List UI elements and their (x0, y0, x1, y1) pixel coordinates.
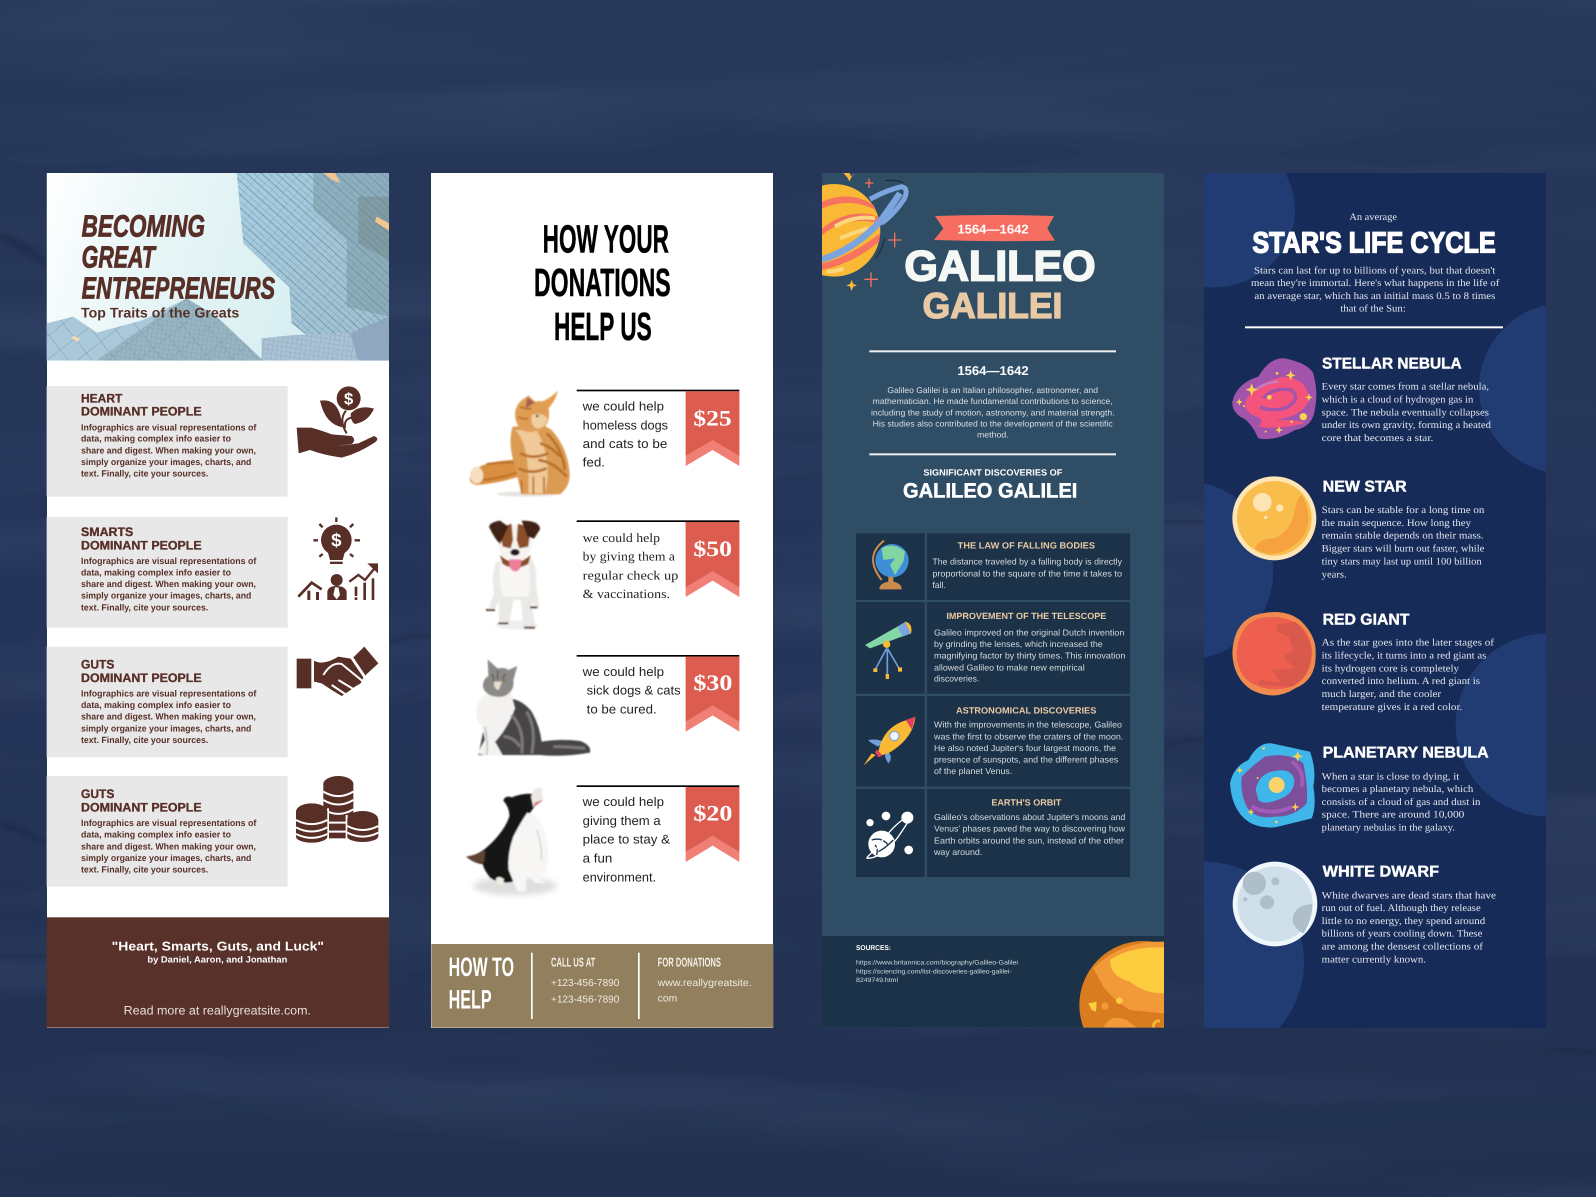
table row: law of falling bodies: THE LAW OF FALLING BODIES (958, 541, 1095, 551)
title (534, 217, 671, 349)
section: red giant: its lifecycle, it turns into a red giant as (1322, 650, 1486, 661)
row: $25: homeless dogs (583, 418, 668, 432)
row: guts dominant people: share and digest. When making your own, (81, 712, 256, 722)
row: $25 (577, 390, 739, 470)
table row: improvement of the telescope: allowed Galileo to make new empirical (934, 662, 1085, 672)
icon: rocket (863, 717, 915, 766)
row: $50: by giving them a (583, 550, 675, 564)
icon: coin stacks (296, 776, 378, 843)
section: stellar nebula: space. The nebula eventually collapses (1322, 407, 1489, 418)
header photo: glass skyscrapers (47, 173, 389, 628)
subtitle: Top Traits of the Greats (81, 305, 239, 321)
decorative background circles (1204, 173, 1546, 1028)
section: planetary nebula: planetary nebulas in the galaxy. (1322, 822, 1455, 833)
section: new star: years. (1322, 569, 1347, 580)
icon: handshake (297, 647, 378, 696)
icon: new star (1232, 476, 1316, 560)
row: $25: we could help (582, 400, 664, 414)
footer: sources: 8249749.html (856, 977, 898, 984)
header text: an average star, which has an initial mass 0.5 to 8 times (1254, 290, 1495, 301)
row: heart dominant people: share and digest. When making your own, (81, 445, 256, 455)
title: HOW YOUR (543, 217, 669, 261)
section: stellar nebula: core that becomes a star. (1322, 432, 1433, 443)
icon: hand holding money plant (297, 386, 377, 458)
row: guts dominant people: DOMINANT PEOPLE (81, 671, 202, 685)
table row: astronomical discoveries: ASTRONOMICAL DISCOVERIES (956, 705, 1096, 715)
row: $30: to be cured. (587, 702, 657, 716)
title: GALILEO (904, 242, 1096, 290)
section: red giant: its hydrogen core is completely (1322, 663, 1459, 674)
row: $25: $25 (693, 406, 732, 431)
row: guts dominant people second: GUTS (81, 787, 114, 801)
icon: stellar nebula (1232, 358, 1316, 439)
icon: telescope (865, 622, 912, 679)
row: guts dominant people: GUTS (81, 658, 114, 671)
row: guts dominant people second: Infographics are visual representations of (81, 818, 257, 828)
section: white dwarf: White dwarves are dead stars that have (1322, 890, 1496, 901)
header text: Stars can last for up to billions of years, but that doesn't (1254, 265, 1496, 276)
row: $20 (577, 785, 739, 884)
section: red giant: converted into helium. A red giant is (1322, 675, 1480, 686)
table row: improvement of the telescope: magnifying factor by thirty times. This innovation (934, 651, 1125, 661)
footer: how to help: +123-456-7890 (551, 977, 619, 988)
row: smarts dominant people: data, making complex info easier to (81, 568, 231, 578)
row: guts dominant people second: DOMINANT PEOPLE (81, 800, 202, 814)
section: white dwarf: matter currently known. (1322, 954, 1426, 965)
section: white dwarf: run out of fuel. Although they release (1322, 902, 1481, 913)
icon: planets in orbit (866, 812, 913, 858)
table row: law of falling bodies: fall. (932, 580, 946, 590)
section: stellar nebula: Every star comes from a stellar nebula, (1322, 381, 1489, 392)
table row: improvement of the telescope: discoveries. (934, 674, 979, 684)
row: $20: a fun (583, 851, 612, 865)
heading: significant discoveries: GALILEO GALILEI (903, 479, 1077, 502)
table row: astronomical discoveries: presence of sunspots, and the different phases (934, 755, 1118, 765)
section: red giant: RED GIANT (1323, 610, 1409, 628)
row: $50: & vaccinations. (583, 587, 670, 601)
title: DONATIONS (534, 261, 671, 305)
ribbon: dates (934, 215, 1055, 241)
footer: book quote (47, 917, 389, 1028)
footer: how to help: HELP (449, 984, 492, 1014)
icon: light bulb with chart (298, 517, 378, 600)
row: heart dominant people: HEART (81, 391, 122, 405)
header text: STAR'S LIFE CYCLE (1252, 226, 1496, 259)
title: BECOMING (82, 209, 205, 243)
footer: how to help: FOR DONATIONS (658, 956, 721, 970)
row: guts dominant people second (47, 776, 288, 887)
biography text block: including the study of motion, astronomy, and material strength. (871, 408, 1115, 417)
row: guts dominant people (47, 647, 288, 757)
footer: sources: https://sciencing.com/list-discoveries-galileo-galilei- (856, 968, 1012, 975)
panel: becoming great entrepreneurs (47, 173, 389, 1028)
photo: grey long-haired cat (476, 659, 590, 756)
row: $20: environment. (583, 870, 656, 884)
row: guts dominant people: Infographics are visual representations of (81, 689, 257, 699)
header text: that of the Sun: (1340, 303, 1406, 314)
row: smarts dominant people: simply organize your images, charts, and (81, 591, 251, 601)
section: planetary nebula: consists of a cloud of gas and dust in (1322, 796, 1480, 807)
row: heart dominant people (47, 386, 288, 497)
table row: law of falling bodies (856, 533, 1130, 600)
row: $20: giving them a (583, 814, 661, 828)
biography text block (869, 350, 1116, 455)
section: new star: Stars can be stable for a long time on (1322, 504, 1484, 515)
section: stellar nebula: under its own gravity, forming a heated (1322, 419, 1491, 430)
footer: sources: https://www.britannica.com/biography/Galileo-Galilei (856, 959, 1018, 966)
row: smarts dominant people: Infographics are visual representations of (81, 556, 257, 566)
row: $20: place to stay & (583, 833, 670, 847)
section: red giant: As the star goes into the later stages of (1322, 637, 1494, 648)
row: $50: we could help (583, 531, 660, 545)
section: new star: tiny stars may last up until 100 billion (1322, 556, 1482, 567)
table row: astronomical discoveries: He also noted Jupiter's four largest moons, the (934, 743, 1116, 753)
ribbon: dates: 1564—1642 (957, 222, 1029, 236)
section: new star: Bigger stars will burn out faster, while (1322, 543, 1484, 554)
section: white dwarf: are among the densest collections of (1322, 941, 1483, 952)
row: guts dominant people second: share and digest. When making your own, (81, 841, 256, 851)
section: white dwarf: billions of years cooling down. These (1322, 928, 1482, 939)
footer: how to help: HOW TO (449, 952, 514, 982)
title: ENTREPRENEURS (82, 271, 275, 305)
row: $30: $30 (693, 671, 732, 695)
row: guts dominant people second: simply organize your images, charts, and (81, 853, 251, 863)
heading: significant discoveries (903, 467, 1077, 502)
table row: improvement of the telescope: Galileo improved on the original Dutch invention (934, 628, 1124, 638)
title (82, 209, 275, 305)
section: white dwarf: little to no energy, they spend around (1322, 915, 1485, 926)
header text: An average (1349, 211, 1397, 222)
row: $30 (577, 655, 739, 732)
title (904, 242, 1096, 326)
row: $20: we could help (582, 795, 664, 809)
title: HELP US (554, 305, 652, 349)
section: red giant: temperature gives it a red color. (1322, 701, 1462, 712)
biography text block: His studies also contributed to the development of the scientific (873, 419, 1113, 428)
section: planetary nebula: space. There are around 10,000 (1322, 809, 1464, 820)
section: stellar nebula: which is a cloud of hydrogen gas in (1322, 394, 1473, 405)
row: smarts dominant people: text. Finally, cite your sources. (81, 602, 208, 612)
illustration: orange planet (1079, 941, 1164, 1028)
footer: how to help: www.reallygreatsite. (657, 977, 752, 988)
row: $50: $50 (693, 537, 732, 561)
footer: how to help: CALL US AT (551, 956, 595, 970)
table row: law of falling bodies: The distance traveled by a falling body is directly (932, 557, 1122, 567)
icon: light bulb with chart: $ (331, 530, 342, 551)
photo: jack russell dog (486, 521, 540, 630)
icon: planetary nebula (1230, 743, 1315, 827)
biography text block: mathematician. He made fundamental contributions to science, (873, 397, 1113, 406)
table row: astronomical discoveries: of the planet Venus. (934, 766, 1012, 776)
table row: law of falling bodies: proportional to the square of the time it takes to (932, 568, 1122, 578)
row: $50 (577, 520, 739, 601)
row: $20: $20 (693, 801, 732, 825)
row: heart dominant people: simply organize your images, charts, and (81, 457, 251, 467)
row: $25: and cats to be (583, 437, 667, 451)
row: $30: sick dogs & cats (587, 684, 681, 698)
table row: earth's orbit (856, 789, 1130, 877)
icon: red giant (1232, 612, 1316, 695)
icon: globe (873, 541, 909, 589)
footer: how to help: +123-456-7890 (551, 994, 619, 1005)
footer: book quote: by Daniel, Aaron, and Jonathan (147, 955, 287, 965)
section: red giant: much larger, and the cooler (1322, 688, 1441, 699)
table row: astronomical discoveries (856, 696, 1130, 787)
panel: galileo galilei (822, 173, 1164, 1028)
illustration: ringed planet (822, 173, 909, 291)
row: guts dominant people: data, making complex info easier to (81, 700, 231, 710)
table row: improvement of the telescope (856, 602, 1130, 694)
section: new star: NEW STAR (1323, 477, 1407, 495)
section: planetary nebula: When a star is close to dying, it (1322, 771, 1460, 782)
row: smarts dominant people: SMARTS (81, 525, 133, 539)
table row: earth's orbit: Galileo's observations about Jupiter's moons and (934, 812, 1125, 822)
footer: sources (822, 936, 1164, 1028)
title: GREAT (82, 240, 157, 274)
biography text block: 1564—1642 (957, 364, 1029, 378)
table row: astronomical discoveries: With the improvements in the telescope, Galileo (934, 720, 1122, 730)
row: $25: fed. (583, 456, 605, 470)
row: heart dominant people: data, making complex info easier to (81, 434, 231, 444)
table row: improvement of the telescope: IMPROVEMENT OF THE TELESCOPE (946, 611, 1106, 621)
section: white dwarf (1233, 862, 1496, 965)
section: stellar nebula: STELLAR NEBULA (1322, 354, 1462, 372)
footer: book quote: "Heart, Smarts, Guts, and Luck" (112, 940, 324, 954)
icon: hand holding money plant: $ (344, 389, 353, 408)
row: guts dominant people: text. Finally, cite your sources. (81, 735, 208, 745)
row: $30: we could help (582, 665, 664, 679)
row: guts dominant people second: text. Finally, cite your sources. (81, 864, 208, 874)
row: $50: regular check up (583, 568, 678, 582)
row: smarts dominant people: DOMINANT PEOPLE (81, 538, 202, 552)
photo: black and white collie (466, 787, 557, 895)
header text: mean they're immortal. Here's what happens in the life of (1251, 277, 1499, 288)
table row: improvement of the telescope: by grinding the lenses, which increased the (934, 639, 1103, 649)
footer: book quote: Read more at reallygreatsite.com. (124, 1003, 311, 1017)
row: heart dominant people: DOMINANT PEOPLE (81, 405, 202, 418)
title: GALILEI (923, 285, 1062, 326)
icon: white dwarf (1233, 862, 1317, 946)
section: new star (1232, 476, 1484, 580)
row: heart dominant people: Infographics are visual representations of (81, 422, 257, 432)
biography text block: Galileo Galilei is an Italian philosopher, astronomer, and (887, 386, 1098, 395)
footer: how to help (431, 944, 773, 1028)
section: new star: the main sequence. How long they (1322, 517, 1471, 528)
section: planetary nebula: PLANETARY NEBULA (1323, 743, 1489, 761)
heading: significant discoveries: SIGNIFICANT DISCOVERIES OF (923, 467, 1062, 477)
table row: astronomical discoveries: was the first to observe the craters of the moon. (934, 731, 1123, 741)
row: guts dominant people: simply organize your images, charts, and (81, 723, 251, 733)
section: planetary nebula (1230, 743, 1489, 833)
row: smarts dominant people: share and digest. When making your own, (81, 579, 256, 589)
footer: how to help: com (658, 993, 677, 1004)
biography text block: method. (977, 430, 1009, 440)
row: guts dominant people second: data, making complex info easier to (81, 830, 231, 840)
photo: orange cat (470, 391, 570, 497)
table row: earth's orbit: Venus' phases paved the way to discovering how (934, 824, 1125, 834)
header text (1245, 211, 1503, 328)
section: red giant (1232, 610, 1494, 712)
section: planetary nebula: becomes a planetary nebula, which (1322, 783, 1473, 794)
table row: earth's orbit: EARTH'S ORBIT (991, 797, 1062, 807)
section: stellar nebula (1232, 354, 1491, 443)
panel: star's life cycle (1204, 173, 1546, 1028)
section: white dwarf: WHITE DWARF (1323, 862, 1439, 880)
row: heart dominant people: text. Finally, cite your sources. (81, 469, 208, 479)
table row: earth's orbit: Earth orbits around the sun, instead of the other (934, 835, 1124, 845)
section: new star: remain stable depends on their mass. (1322, 530, 1484, 541)
row: smarts dominant people (47, 517, 288, 628)
panel: how your donations help us (431, 173, 773, 1028)
table row: earth's orbit: way around. (934, 847, 982, 857)
footer: sources: SOURCES: (856, 944, 891, 952)
